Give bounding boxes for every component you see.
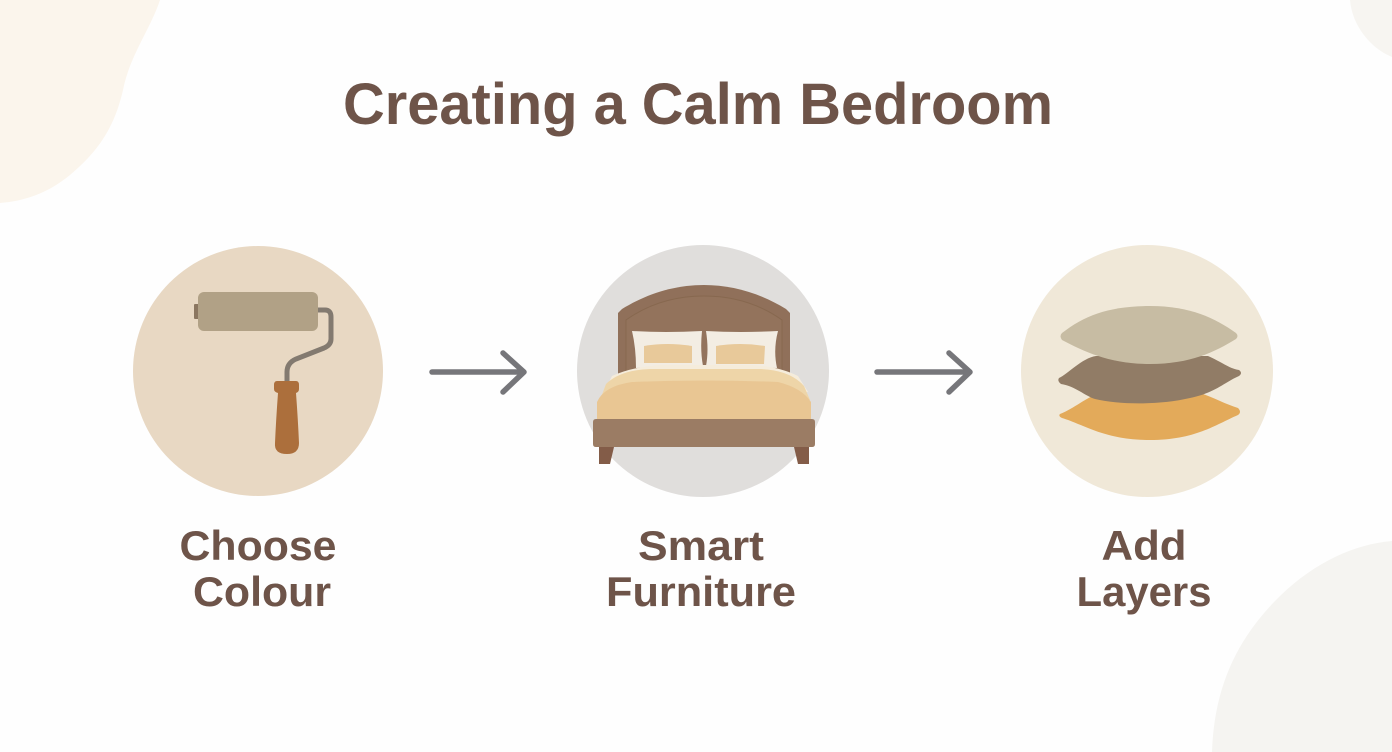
label: add layers: Layers [1076,568,1212,615]
icon: paint roller [194,292,331,454]
label: choose colour [180,522,336,615]
label: smart furniture: Smart [638,522,764,569]
icon: stacked cushions [1058,306,1241,440]
step 1: choose colour [133,246,383,615]
circle: choose colour background [133,246,383,496]
background blob: top right [1350,0,1392,57]
circle: smart furniture background [577,245,829,497]
label: choose colour: Choose [180,522,336,569]
label: add layers [1076,522,1212,615]
icon: bed [593,285,815,464]
arrow 1 [432,353,524,392]
background blob: top left [0,0,160,203]
arrow 2 [877,353,970,392]
step 3: add layers [1021,245,1273,615]
background blob: bottom right [1212,541,1392,752]
label: smart furniture [606,522,796,615]
label: smart furniture: Furniture [606,568,796,615]
title: Creating a Calm Bedroom [343,72,1053,137]
label: choose colour: Colour [193,568,331,615]
label: add layers: Add [1102,522,1186,569]
step 2: smart furniture [577,245,829,615]
circle: add layers background [1021,245,1273,497]
